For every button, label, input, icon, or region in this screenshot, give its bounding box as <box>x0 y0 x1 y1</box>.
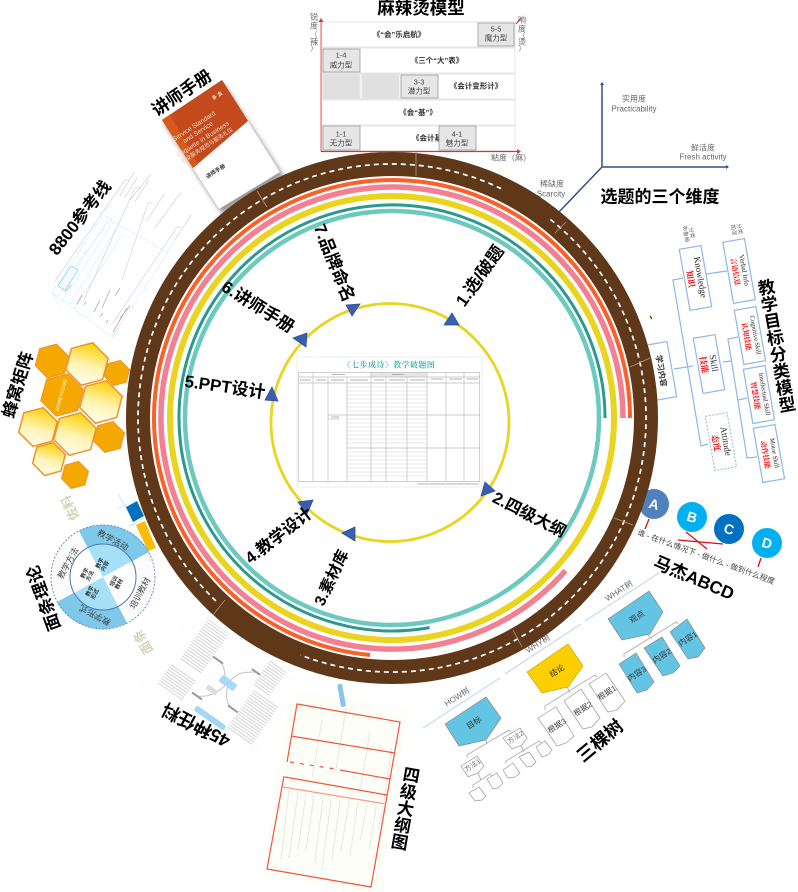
WHAT tree: 内容3 <box>625 664 648 683</box>
sheet <box>297 357 482 487</box>
divider lines <box>423 573 659 728</box>
side node <box>206 685 218 695</box>
heading: 马杰ABCD <box>651 552 737 604</box>
row labels: 《“会”乐启航》 <box>373 29 425 39</box>
box: learning content: 学习内容 <box>654 354 669 388</box>
orange cover <box>162 80 248 168</box>
page shadow <box>164 84 284 214</box>
ring labels: 教学形式 <box>77 602 112 627</box>
level buttons: 3-3 <box>414 78 424 86</box>
blue highlight <box>58 266 78 290</box>
level buttons: 5-5 <box>491 24 501 34</box>
header text lines <box>300 374 479 484</box>
axis end dots <box>600 82 729 169</box>
step labels: 3.素材库 <box>310 547 352 609</box>
WHY tree: 根据2 <box>571 699 594 718</box>
axis labels: 鲜活度 <box>691 142 715 152</box>
map branches <box>197 660 256 709</box>
WHAT tree <box>608 591 705 693</box>
box: skill: 技能 <box>698 356 711 375</box>
level buttons: 潜力型 <box>408 86 431 96</box>
lane dashes <box>138 164 646 672</box>
box: learning content <box>645 342 677 400</box>
annotation lines <box>120 172 191 240</box>
step labels: 7.品牌命名 <box>310 221 359 305</box>
panel: three dimensions of topic selection <box>537 82 729 213</box>
list blocks <box>158 619 287 745</box>
tree labels: WHY树 <box>524 632 552 655</box>
box: knowledge: Knowledge <box>692 256 709 298</box>
heading: 三棵树 <box>573 716 627 766</box>
box: intellectual skill: Intellectual Skill <box>757 372 771 416</box>
inner labels: 内容 <box>99 559 111 573</box>
arrow markers <box>265 304 495 541</box>
teal ring <box>185 211 599 625</box>
header shading <box>371 372 427 377</box>
level buttons: 1-1 <box>336 130 346 138</box>
box: cognitive skill: Cognitive Skill <box>748 315 762 355</box>
box: cognitive skill: 认知技能 <box>740 322 753 351</box>
model grid rows <box>322 22 515 151</box>
box: verbal info <box>723 239 755 303</box>
heading: 教学目标分类模型 <box>754 277 796 415</box>
level buttons: 威力型 <box>330 60 353 70</box>
step labels: 6.讲师手册 <box>218 276 298 337</box>
axis labels: （ <box>310 30 318 38</box>
heading: 选题的三个维度 <box>600 188 720 206</box>
small classification labels: 分类 <box>687 227 697 239</box>
small classification labels: 布鲁姆 <box>681 225 691 243</box>
axis labels: 度 <box>518 24 526 34</box>
box: attitude <box>705 413 737 470</box>
blue sectors <box>57 525 149 629</box>
inner labels: 教材 <box>113 577 125 591</box>
panel: 45 kinds of materials mind map <box>135 605 305 770</box>
ring labels: 教学活动 <box>96 528 131 553</box>
heading: 45种任料 <box>159 699 233 751</box>
panel: three trees <box>423 573 705 801</box>
cream page <box>262 688 409 892</box>
panel: Mager ABCD <box>636 489 782 604</box>
inner labels: 教学 <box>78 566 91 580</box>
axis labels: 响 <box>518 14 526 24</box>
caption: 谁 - 在什么情况下 - 做什么 - 做到什么程度 <box>636 527 776 586</box>
outer road ring <box>138 152 650 672</box>
inner labels: 教学 <box>93 556 106 570</box>
panel: seven-step table <box>297 357 482 487</box>
panel: teaching objectives classification model <box>645 223 796 482</box>
inner labels <box>78 556 125 601</box>
box: knowledge: 知识 <box>684 270 697 290</box>
box: intellectual skill <box>743 366 775 423</box>
table title: 《七步成诗》教学破题图 <box>343 360 435 370</box>
inner labels: 方法 <box>84 569 96 583</box>
box: attitude: Attitude <box>718 426 733 457</box>
HOW tree: 方法1 <box>462 756 482 774</box>
heading: 8800参考线 <box>44 177 115 259</box>
axis labels: 实用度 <box>622 94 646 104</box>
WHAT tree: 内容2 <box>650 646 673 665</box>
circle B <box>677 502 707 532</box>
inner sectors <box>74 544 132 610</box>
axis labels: Fresh activity <box>679 152 727 162</box>
hexagons <box>16 338 131 492</box>
cyan guides <box>52 205 175 337</box>
row labels: 《会计基础》 <box>412 132 457 142</box>
axis labels: 辣 <box>310 36 318 46</box>
ring labels: 教学方法 <box>56 546 80 580</box>
axis labels: 烫 <box>518 36 526 46</box>
root node <box>337 684 346 707</box>
circle C <box>714 514 744 544</box>
WHAT tree: 观点 <box>628 609 646 625</box>
circle A <box>639 489 669 519</box>
inner labels: 形式 <box>89 587 101 601</box>
wheel <box>51 525 155 629</box>
level buttons: 4-1 <box>452 130 462 138</box>
dashed rim <box>51 525 155 629</box>
cover text: and Service <box>182 120 215 145</box>
heading: 讲师手册 <box>148 65 215 120</box>
level buttons: 无力型 <box>330 138 353 148</box>
cover text: Service Standard <box>171 110 217 143</box>
orange arc <box>154 180 630 655</box>
box: knowledge <box>679 246 712 310</box>
level buttons: 1-4 <box>336 50 346 60</box>
box: motor skill: 动作技能 <box>759 440 772 469</box>
WHY tree: 根据1 <box>595 683 618 702</box>
step labels: 2.四级大纲 <box>489 487 570 541</box>
heading: 面条理论 <box>23 563 65 634</box>
axis labels: 度 <box>310 20 318 30</box>
box: verbal info: Verbal Info <box>737 254 751 287</box>
axis labels <box>537 94 727 198</box>
inner wheel <box>70 544 136 610</box>
pink arc <box>161 187 623 649</box>
box: skill <box>693 335 725 393</box>
ring labels <box>56 528 153 627</box>
yellow ring <box>170 196 614 640</box>
circle C: C <box>722 520 736 538</box>
axis labels: ） <box>310 44 318 52</box>
box: verbal info: 言语信息 <box>729 257 743 287</box>
label: seasoning: 佐料 <box>58 493 82 523</box>
outline text columns <box>281 708 392 870</box>
heading: 蜂窝矩阵 <box>0 349 37 420</box>
HOW tree: 目标 <box>464 714 483 731</box>
purple guides <box>55 180 181 323</box>
connectors <box>673 271 757 458</box>
tree labels <box>442 578 634 708</box>
red underlines <box>645 519 761 567</box>
small classification labels: 分类 <box>735 223 745 235</box>
tree labels: WHAT树 <box>603 578 634 603</box>
panel: 8800 reference lines <box>44 172 191 337</box>
axis labels: 锐 <box>310 12 318 22</box>
table rules <box>347 383 427 476</box>
inner labels: 培训 <box>107 574 120 588</box>
small mark <box>650 316 652 319</box>
axis labels: ） <box>518 44 526 52</box>
small labels <box>65 285 130 332</box>
heading: 四级大纲图 <box>387 764 421 851</box>
level buttons: 魅力型 <box>446 138 469 148</box>
row labels: 《会计变形计》 <box>450 80 502 90</box>
model axes <box>318 18 521 154</box>
inner yellow circle <box>271 304 509 542</box>
panel: spicy hot model <box>310 0 531 162</box>
manual label: 讲师手册 <box>204 162 227 181</box>
WHY tree: 结论 <box>547 662 566 679</box>
cover text <box>171 90 235 165</box>
blue pill <box>194 705 226 731</box>
panel: honeycomb matrix <box>0 338 131 492</box>
hexagon label: HONEYCOMB <box>55 378 69 412</box>
WHY tree: 根据3 <box>545 716 568 735</box>
center node <box>218 675 238 691</box>
bars <box>118 494 156 551</box>
HOW tree: 方法2 <box>505 728 525 746</box>
axis labels: 稀缺度 <box>540 178 564 188</box>
cover text: 多 金 <box>211 90 224 102</box>
step labels: 4.教学设计 <box>241 503 316 568</box>
row labels: 《三个“大”表》 <box>411 55 463 65</box>
WHY tree <box>527 644 625 746</box>
step labels: 5.PPT设计 <box>183 372 267 402</box>
axis labels: Scarcity <box>537 190 565 198</box>
box: motor skill <box>753 425 785 482</box>
red outline <box>267 704 400 887</box>
page <box>162 80 280 209</box>
panel: noodle theory <box>23 493 156 657</box>
brown ring <box>138 164 646 672</box>
step labels: 1.选/破题 <box>452 242 508 310</box>
circle B: B <box>685 508 699 526</box>
axes <box>558 85 727 213</box>
cover text: Etiquette in Business <box>176 120 231 159</box>
tree labels: HOW树 <box>442 685 471 708</box>
axis labels: （ <box>518 32 526 40</box>
row labels: 《会“基”》 <box>399 107 437 117</box>
circle A: A <box>647 495 661 513</box>
box: motor skill: Motor Skill <box>768 438 780 469</box>
box: cognitive skill <box>734 307 766 364</box>
axis labels: 粘度（麻） <box>491 152 531 162</box>
WHAT tree: 内容1 <box>676 629 699 648</box>
inner labels: 教学 <box>83 584 96 598</box>
panel: lecturer manual <box>148 65 284 214</box>
cover text: 商业服务规范与服务礼仪 <box>179 125 235 165</box>
small classification labels <box>681 223 745 243</box>
panel: four-level outline <box>262 684 421 892</box>
box: attitude: 态度 <box>710 434 723 453</box>
axis labels <box>310 12 531 162</box>
circle D <box>752 528 782 558</box>
HOW tree <box>445 697 552 801</box>
sub-topic nodes <box>192 656 261 713</box>
faint sheet <box>135 605 305 770</box>
step labels <box>183 221 570 609</box>
connectors <box>467 622 678 788</box>
row labels <box>373 29 502 142</box>
box: skill: Skill <box>708 354 720 373</box>
level buttons <box>323 23 514 150</box>
label: noodles: 面条 <box>130 627 156 657</box>
small classification labels: 加涅 <box>729 224 739 236</box>
stage dividers <box>213 152 650 647</box>
ring labels: 培训教材 <box>128 575 153 610</box>
axis labels: Practicability <box>612 104 656 114</box>
dark teal arc <box>179 205 605 631</box>
level buttons: 魔力型 <box>485 32 508 42</box>
box: intellectual skill: 智慧技能 <box>749 381 762 410</box>
circle D: D <box>760 534 774 552</box>
